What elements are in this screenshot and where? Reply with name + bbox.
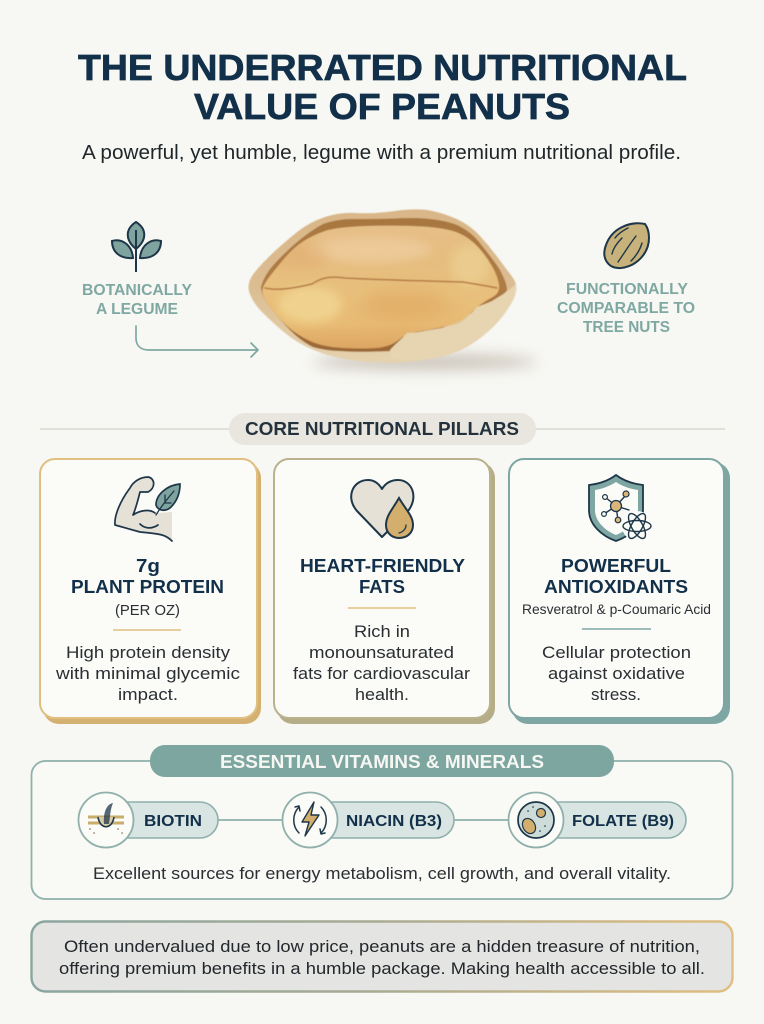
- text: antioxidants description: against oxidative: [548, 665, 685, 683]
- icon: flexed arm and leaf: [115, 477, 180, 541]
- icon: lightning with cycle arrows: [294, 802, 326, 836]
- heading: essential vitamins and minerals: [150, 745, 614, 777]
- callout: closing message: offering premium benefits in a humble package. Making health accessible to all.: [59, 960, 705, 978]
- title: [78, 47, 687, 127]
- text: vitamins summary: Excellent sources for energy metabolism, cell growth, and overall vitality.: [93, 865, 671, 883]
- subheading: per oz: (PER OZ): [115, 602, 180, 619]
- heading: 7g plant protein: [71, 555, 224, 597]
- callout: closing message: [32, 922, 732, 992]
- peanut cavity: [261, 218, 507, 352]
- subtitle: A powerful, yet humble, legume with a premium nutritional profile.: [82, 142, 681, 164]
- title: VALUE OF PEANUTS: [194, 86, 570, 127]
- peanut kernel tones: [272, 237, 490, 323]
- text: protein description: impact.: [118, 686, 178, 704]
- text: antioxidants description: Cellular protection: [542, 644, 691, 662]
- panel: heart-friendly fats: [274, 459, 495, 724]
- text: fats description: monounsaturated: [309, 644, 454, 662]
- torn shell: [390, 284, 516, 360]
- label: biotin: BIOTIN: [144, 813, 202, 830]
- label: functionally comparable to tree nuts: COMPARABLE TO: [557, 300, 695, 317]
- kernel seam: [265, 277, 497, 289]
- label: botanically a legume: [82, 282, 193, 318]
- panel: powerful antioxidants: [509, 459, 730, 724]
- text: protein description: High protein density: [66, 644, 231, 662]
- heading: powerful antioxidants: [544, 555, 688, 597]
- heading: heart-friendly fats: HEART-FRIENDLY: [300, 555, 466, 576]
- text: fats description: health.: [355, 686, 409, 704]
- heading: core nutritional pillars: [229, 413, 536, 445]
- heading: heart-friendly fats: FATS: [359, 576, 405, 597]
- vitamin: biotin: [78, 792, 218, 848]
- vitamin: folate: [508, 792, 686, 848]
- vitamin: niacin: [282, 792, 454, 848]
- panel: plant protein: [40, 459, 261, 724]
- icon: heart and oil drop: [351, 480, 413, 538]
- heading: heart-friendly fats: [300, 555, 466, 597]
- peanut shell: [248, 209, 516, 363]
- title: THE UNDERRATED NUTRITIONAL: [78, 47, 687, 88]
- functionally comparable: [557, 223, 695, 336]
- text: antioxidants description: stress.: [591, 686, 641, 704]
- label: folate b9: FOLATE (B9): [572, 813, 674, 830]
- heading: core nutritional pillars: CORE NUTRITIONAL PILLARS: [245, 419, 519, 439]
- icon: tree nut: [604, 223, 649, 268]
- heading: essential vitamins and minerals: ESSENTIAL VITAMINS & MINERALS: [220, 752, 544, 772]
- text: protein description: with minimal glycemic: [55, 665, 240, 683]
- text: fats description: Rich in: [354, 623, 410, 641]
- text: fats description: [293, 623, 471, 704]
- botanically a legume: [82, 222, 258, 357]
- label: functionally comparable to tree nuts: [557, 281, 695, 336]
- heading: powerful antioxidants: ANTIOXIDANTS: [544, 576, 688, 597]
- heading: 7g plant protein: 7g: [136, 555, 160, 576]
- text: antioxidants description: [542, 644, 691, 704]
- peanut body: [248, 209, 516, 363]
- text: fats description: fats for cardiovascular: [293, 665, 471, 683]
- label: functionally comparable to tree nuts: TREE NUTS: [583, 319, 670, 336]
- icon: shield with molecule and atom: [589, 475, 652, 541]
- heading: powerful antioxidants: POWERFUL: [561, 555, 671, 576]
- heading: 7g plant protein: PLANT PROTEIN: [71, 576, 224, 597]
- panel: essential vitamins and minerals: [32, 745, 732, 899]
- icon: hair follicle: [88, 803, 124, 833]
- label: botanically a legume: A LEGUME: [96, 301, 178, 318]
- callout: closing message: Often undervalued due to low price, peanuts are a hidden treasure of nutrition,: [64, 938, 700, 956]
- label: botanically a legume: BOTANICALLY: [82, 282, 193, 299]
- peanut image: [248, 209, 537, 370]
- peanut shadow: [313, 354, 537, 370]
- text: protein description: [55, 644, 240, 704]
- arrow to peanut: [136, 326, 258, 357]
- subheading: compounds: Resveratrol & p-Coumaric Acid: [522, 602, 711, 617]
- label: niacin b3: NIACIN (B3): [346, 813, 442, 830]
- label: functionally comparable to tree nuts: FUNCTIONALLY: [566, 281, 689, 298]
- peanut kernel: [262, 226, 499, 348]
- icon: leaves: [112, 222, 161, 272]
- icon: cell: [518, 802, 554, 838]
